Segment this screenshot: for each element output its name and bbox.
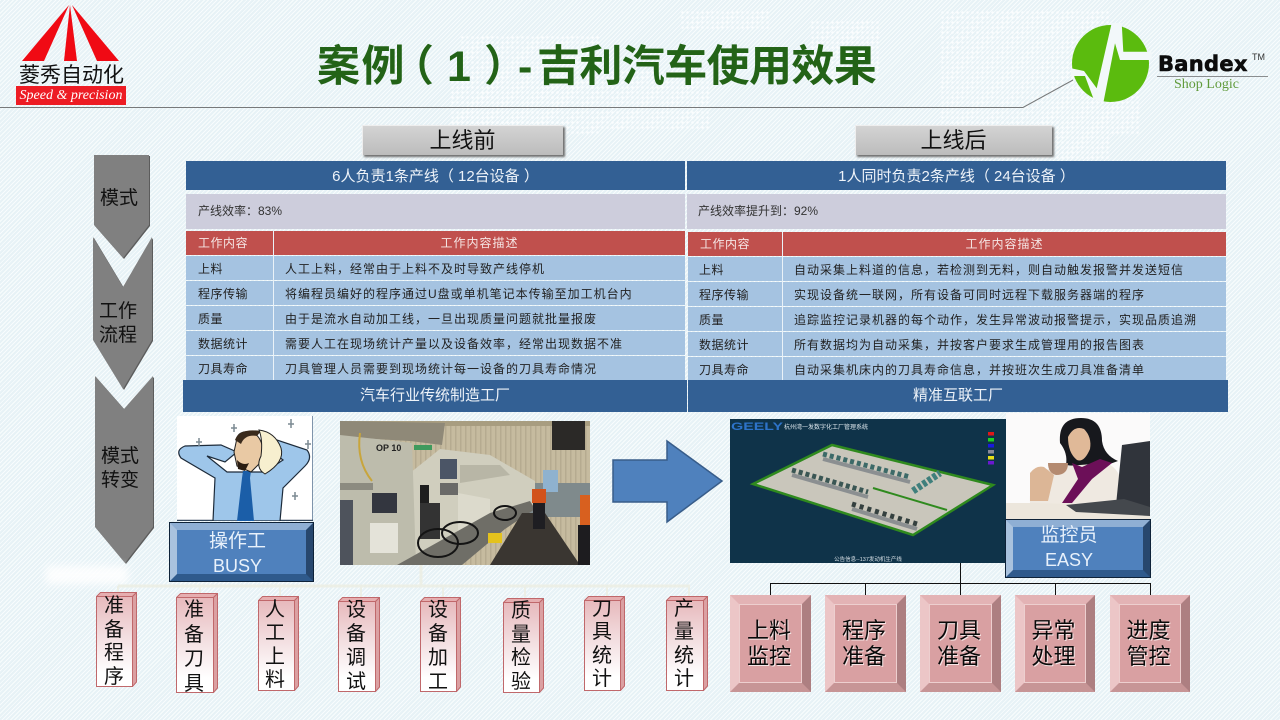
- task: progress control: 管控: [1126, 644, 1170, 669]
- table header: 工作内容: [700, 237, 750, 251]
- blurred ghost label: [46, 566, 128, 584]
- tagline: Shop Logic: [1174, 77, 1239, 92]
- title: ）: [484, 43, 527, 91]
- arrow label: mode change: [101, 446, 139, 491]
- row: program transfer: 程序传输: [699, 288, 749, 302]
- row: data statistics: [688, 332, 1226, 356]
- task: prepare tools: 准备刀具: [184, 599, 204, 695]
- efficiency row: [687, 194, 1226, 229]
- screenshot: Geely digital factory system: 杭州湾一发数字化工厂管理系统: [784, 423, 868, 431]
- task: output statistics: 产量统计: [674, 598, 694, 690]
- arrow: mode: [94, 155, 150, 259]
- row: program transfer: [688, 282, 1226, 306]
- logo slogan band: Speed & precision: [20, 88, 122, 103]
- screenshot: Geely digital factory system: GEELY: [731, 421, 784, 433]
- button: before launch: [362, 125, 563, 155]
- table header: 工作内容: [198, 236, 248, 250]
- logo Chinese name: 菱秀自动化: [19, 64, 124, 87]
- row: loading: 人工上料，经常由于上料不及时导致产线停机: [285, 262, 545, 276]
- background world map dots: [451, 11, 1139, 159]
- task: prepare tools: [176, 593, 218, 695]
- title: -: [518, 43, 532, 91]
- row: data statistics: 数据统计: [699, 338, 749, 352]
- table header: 工作内容描述: [440, 236, 518, 250]
- row: data statistics: 所有数据均为自动采集，并按客户要求生成管理用的报告图表: [794, 338, 1145, 352]
- task: exception handling: 异常: [1031, 618, 1076, 643]
- heading: before mode: [186, 161, 685, 190]
- efficiency row: 产线效率：83%: [198, 204, 282, 218]
- brand name: Bandex: [1158, 52, 1248, 76]
- task: progress control: 进度: [1126, 618, 1170, 643]
- task: equipment setup: [338, 597, 380, 693]
- button: supervisor easy: [1006, 520, 1150, 577]
- task: program preparation: 准备: [842, 644, 886, 669]
- logo: Lingxiu automation: [16, 5, 126, 105]
- icon: green circle with pulse: [1071, 23, 1152, 102]
- illustration: stressed operator: [177, 416, 313, 521]
- panel: before table: [183, 161, 687, 412]
- arrow label: workflow: 工作: [99, 301, 137, 322]
- screenshot: Geely digital factory system: 公告信息--137发动机生产线: [834, 555, 902, 563]
- row: data statistics: [186, 331, 685, 355]
- arrow label: mode change: 模式: [101, 446, 139, 467]
- arrow: mode change: [95, 376, 154, 564]
- task: program preparation: [825, 595, 906, 692]
- button: operator busy: 操作工: [209, 531, 266, 552]
- task: tool statistics: [584, 596, 625, 691]
- title: （: [391, 43, 434, 91]
- row: data statistics: 需要人工在现场统计产量以及设备效率，经常出现数据不准: [285, 337, 623, 351]
- title: 吉利汽车使用效果: [537, 43, 876, 91]
- row: quality: 追踪监控记录机器的每个动作，发生异常波动报警提示，实现品质追溯: [794, 313, 1197, 327]
- row: quality: 由于是流水自动加工线，一旦出现质量问题就批量报废: [285, 312, 597, 326]
- row: quality: 质量: [198, 312, 223, 326]
- row: loading: [688, 257, 1226, 281]
- task: tool preparation: [920, 595, 1001, 692]
- title: 1: [447, 43, 471, 91]
- button: operator busy: BUSY: [213, 556, 262, 576]
- task: equipment setup: 设备调试: [346, 599, 366, 693]
- heading: after mode: [687, 161, 1226, 190]
- task: quality inspection: [503, 598, 544, 693]
- row: loading: [186, 256, 685, 280]
- panel: after table: [687, 161, 1228, 412]
- button: supervisor easy: 监控员: [1040, 525, 1098, 546]
- efficiency row: 产线效率提升到：92%: [698, 204, 818, 218]
- button: before launch: 上线前: [429, 128, 496, 153]
- row: program transfer: 程序传输: [198, 287, 248, 301]
- trademark: TM: [1252, 52, 1265, 62]
- task: loading monitoring: 上料: [747, 618, 791, 643]
- task: exception handling: [1015, 595, 1095, 692]
- row: program transfer: 实现设备统一联网，所有设备可同时远程下载服务器端的程序: [794, 288, 1145, 302]
- table header: 工作内容描述: [965, 237, 1044, 251]
- org connector: left tree: [117, 565, 690, 597]
- table header: [688, 232, 1226, 256]
- button: supervisor easy: EASY: [1045, 550, 1093, 570]
- heading: before mode: 6人负责1条产线（ 12台设备 ）: [332, 168, 539, 185]
- row: tool life: [688, 357, 1226, 381]
- row: loading: 自动采集上料道的信息，若检测到无料，则自动触发报警并发送短信: [794, 263, 1184, 277]
- task: equipment machining: [420, 597, 461, 693]
- row: tool life: 自动采集机床内的刀具寿命信息，并按班次生成刀具准备清单: [794, 363, 1145, 377]
- icon: red tent stripes: [22, 5, 119, 61]
- row: tool life: 刀具寿命: [198, 362, 248, 376]
- button: after launch: 上线后: [920, 128, 986, 153]
- arrow: transformation: [612, 440, 724, 524]
- panel: monitored task boxes: [730, 595, 1190, 692]
- task: tool preparation: 准备: [937, 644, 981, 669]
- footer: precision connected factory: 精准互联工厂: [913, 387, 1003, 404]
- arrow label: mode: 模式: [100, 188, 138, 209]
- heading: after mode: 1人同时负责2条产线（ 24台设备 ）: [838, 168, 1075, 185]
- brand underline: [1157, 76, 1268, 77]
- arrow: workflow: [93, 237, 153, 390]
- table header: [186, 231, 685, 255]
- photo: traditional production line: OP 10: [376, 443, 401, 453]
- task: progress control: [1110, 595, 1190, 692]
- task: prepare program: 准备程序: [104, 595, 124, 688]
- task: prepare program: [96, 592, 137, 688]
- logo: Bandex: [1071, 23, 1268, 102]
- efficiency row: [186, 194, 685, 229]
- task: loading monitoring: 监控: [747, 644, 791, 669]
- row: tool life: 刀具寿命: [699, 363, 749, 377]
- task: tool statistics: 刀具统计: [592, 598, 612, 690]
- org connector: right tree: [770, 563, 1151, 595]
- footer: precision connected factory: [688, 380, 1228, 412]
- arrow label: mode change: 转变: [101, 470, 139, 491]
- footer: traditional factory: [183, 380, 687, 412]
- header rule: [0, 80, 1074, 108]
- button: operator busy: [170, 523, 313, 581]
- title: [317, 43, 876, 91]
- row: loading: 上料: [699, 263, 724, 277]
- photo: relaxed supervisor: [1006, 413, 1150, 519]
- row: loading: 上料: [198, 262, 223, 276]
- row: tool life: 刀具管理人员需要到现场统计每一设备的刀具寿命情况: [285, 362, 597, 376]
- button: after launch: [855, 125, 1052, 155]
- task: quality inspection: 质量检验: [511, 600, 531, 693]
- task: exception handling: 处理: [1031, 644, 1076, 669]
- task: loading monitoring: [730, 595, 811, 692]
- panel: manual task boxes: [96, 592, 708, 695]
- task: tool preparation: 刀具: [937, 618, 981, 643]
- photo: traditional production line: [340, 421, 590, 565]
- task: equipment machining: 设备加工: [428, 599, 448, 693]
- row: program transfer: 将编程员编好的程序通过U盘或单机笔记本传输至加工机台内: [285, 287, 633, 301]
- row: quality: 质量: [699, 313, 724, 327]
- task: program preparation: 程序: [842, 618, 886, 643]
- screenshot: Geely digital factory system: [730, 419, 1006, 563]
- row: quality: [688, 307, 1226, 331]
- task: manual loading: 人工上料: [265, 599, 285, 691]
- task: output statistics: [666, 596, 708, 691]
- arrow label: workflow: [99, 301, 137, 346]
- row: quality: [186, 306, 685, 330]
- row: tool life: [186, 356, 685, 380]
- row: program transfer: [186, 281, 685, 305]
- arrow label: workflow: 流程: [99, 325, 137, 346]
- task: manual loading: [258, 596, 299, 691]
- title: 案例: [317, 43, 406, 91]
- footer: traditional factory: 汽车行业传统制造工厂: [360, 387, 510, 404]
- row: data statistics: 数据统计: [198, 337, 248, 351]
